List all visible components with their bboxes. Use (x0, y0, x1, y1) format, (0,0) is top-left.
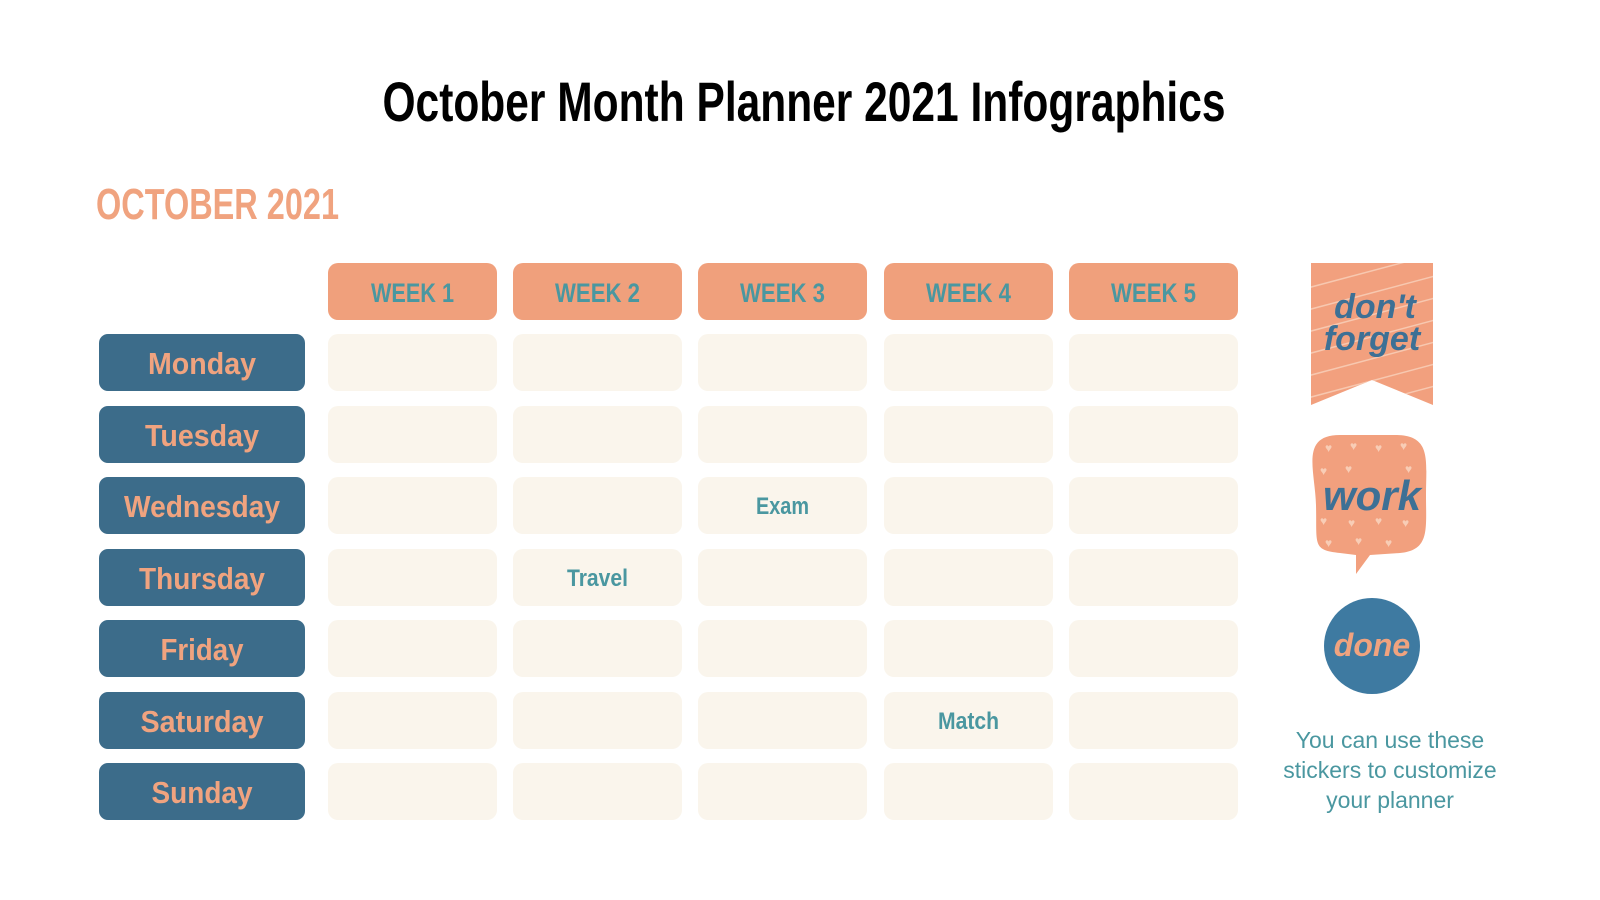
week headers: WEEK 1 (371, 278, 454, 308)
sticker: work speech bubble: ♥ (1350, 439, 1357, 453)
sticker: don't forget flag: forget (1324, 320, 1422, 358)
day labels: Tuesday (145, 418, 260, 453)
sticker caption (1283, 727, 1497, 813)
sticker: work speech bubble: ♥ (1320, 514, 1327, 528)
sticker: don't forget flag (1311, 263, 1433, 405)
sticker: work speech bubble: work (1323, 472, 1424, 519)
sticker: done circle (1324, 598, 1420, 694)
sticker: work speech bubble: ♥ (1355, 534, 1362, 548)
event: Travel: Travel (567, 565, 628, 592)
sticker: work speech bubble (1312, 435, 1426, 574)
sticker: work speech bubble: ♥ (1375, 514, 1382, 528)
week headers: WEEK 3 (740, 278, 825, 308)
week headers: WEEK 4 (926, 278, 1011, 308)
week headers (328, 263, 1238, 320)
sticker: work speech bubble: ♥ (1345, 462, 1352, 476)
sticker: done circle: done (1334, 627, 1410, 663)
day labels: Thursday (139, 561, 266, 596)
sticker: work speech bubble: ♥ (1400, 439, 1407, 453)
calendar grid cells (328, 334, 1238, 820)
week headers: WEEK 5 (1111, 278, 1196, 308)
day labels: Wednesday (124, 489, 281, 524)
sticker: work speech bubble: ♥ (1385, 536, 1392, 550)
month heading: OCTOBER 2021 (96, 180, 339, 229)
day labels: Monday (148, 346, 257, 381)
sticker: work speech bubble: ♥ (1325, 536, 1332, 550)
sticker: work speech bubble: ♥ (1348, 516, 1355, 530)
sticker: work speech bubble: ♥ (1405, 462, 1412, 476)
sticker: work speech bubble: ♥ (1402, 516, 1409, 530)
day labels (99, 334, 305, 820)
sticker: don't forget flag: don't (1334, 288, 1418, 326)
week headers: WEEK 2 (555, 278, 640, 308)
sticker: work speech bubble: ♥ (1320, 464, 1327, 478)
sticker caption: your planner (1326, 787, 1454, 813)
event: Match: Match (938, 708, 999, 735)
sticker: work speech bubble: ♥ (1375, 441, 1382, 455)
day labels: Sunday (152, 775, 253, 810)
sticker: work speech bubble: ♥ (1325, 441, 1332, 455)
sticker caption: stickers to customize (1283, 757, 1497, 783)
day labels: Saturday (140, 704, 264, 739)
event: Exam: Exam (756, 493, 809, 520)
title: October Month Planner 2021 Infographics (382, 70, 1226, 133)
sticker caption: You can use these (1296, 727, 1484, 753)
day labels: Friday (160, 632, 244, 667)
